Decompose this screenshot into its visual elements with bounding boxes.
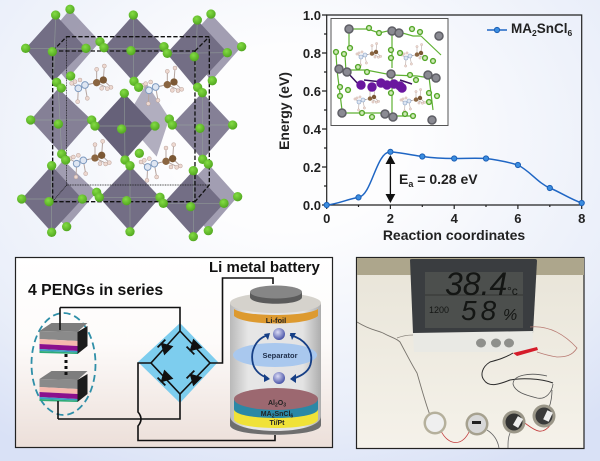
activation energy label: a [408,179,414,189]
x axis labels: 6 [514,211,522,226]
data line [324,149,584,208]
x axis labels: 2 [387,211,394,226]
electrode stack [234,408,318,428]
x axis labels: 4 [451,211,459,226]
wiring [58,278,275,440]
molecules [68,64,184,182]
battery: MA [261,411,272,418]
panel: device photo [356,258,584,448]
thermometer: °c [507,284,518,298]
thermometer [410,259,537,352]
y axis labels: 0.6 [303,84,321,99]
battery: O [278,400,284,407]
inset molecules [354,42,427,112]
battery: 3 [283,402,286,408]
buttons [476,338,514,348]
x axis labels: 0 [323,211,330,226]
battery: Separator [262,351,298,360]
heading: Li metal battery: Li metal battery [209,259,321,276]
energy chart [276,8,585,243]
chlorine atoms [17,5,246,241]
battery: SnCl [274,411,290,418]
legend: 6 [568,28,572,38]
plot frame and ticks [322,15,582,209]
Li ions [273,328,285,384]
battery: Ti/Pt [269,420,285,427]
inset: migration path [331,18,448,126]
piezo discs [424,404,556,436]
separator [233,343,317,367]
thermometer: 58 [461,295,500,326]
PENG stack [32,308,96,419]
arrow heads [386,155,395,203]
thermometer: 38.4 [445,266,507,302]
battery body [230,303,321,435]
battery [230,286,321,435]
wall background [357,258,584,275]
back faces of octahedra [33,9,242,231]
battery: 2 [275,402,278,408]
y axis labels: 0.8 [303,46,321,61]
legend: 2 [532,28,537,38]
battery: 6 [290,414,293,420]
y axis title: Energy (eV) [276,72,292,150]
battery: Li-foil [266,316,286,325]
x axis labels: 8 [578,211,585,226]
panel: PENG circuit and battery [16,258,332,448]
unit cell dashed box [53,37,209,202]
inset atoms [334,26,439,119]
legend [487,21,572,38]
y axis labels: 0.4 [303,122,322,137]
purple Li migration path [347,72,412,93]
activation energy label: = 0.28 eV [413,171,478,187]
rectifier diamond [138,323,218,403]
diodes [158,340,201,385]
thermometer: 1200 [429,305,449,315]
thermometer: % [503,307,517,324]
x axis labels [323,211,585,226]
red clip [513,347,538,356]
front octahedra [22,15,233,237]
heading: 4 PENGs in series: 4 PENGs in series [28,282,163,299]
y axis labels: 1.0 [303,8,321,23]
arrowheads on ion arrows [264,333,296,383]
activation energy arrow [389,157,391,201]
y axis labels: 0.0 [303,198,321,213]
wires [357,322,577,448]
y axis labels [303,8,322,213]
battery: Al [268,400,275,407]
Li-foil layer [234,309,318,324]
x axis title: Reaction coordinates [383,227,525,243]
top terminal [250,292,302,304]
activation energy label: E [399,171,408,187]
battery: 2 [272,414,275,420]
crystal structure of MA2SnCl6 [17,5,246,241]
ion arrows [252,335,311,379]
legend: SnCl [537,21,568,36]
y axis labels: 0.2 [303,160,321,175]
legend: MA [511,21,532,36]
